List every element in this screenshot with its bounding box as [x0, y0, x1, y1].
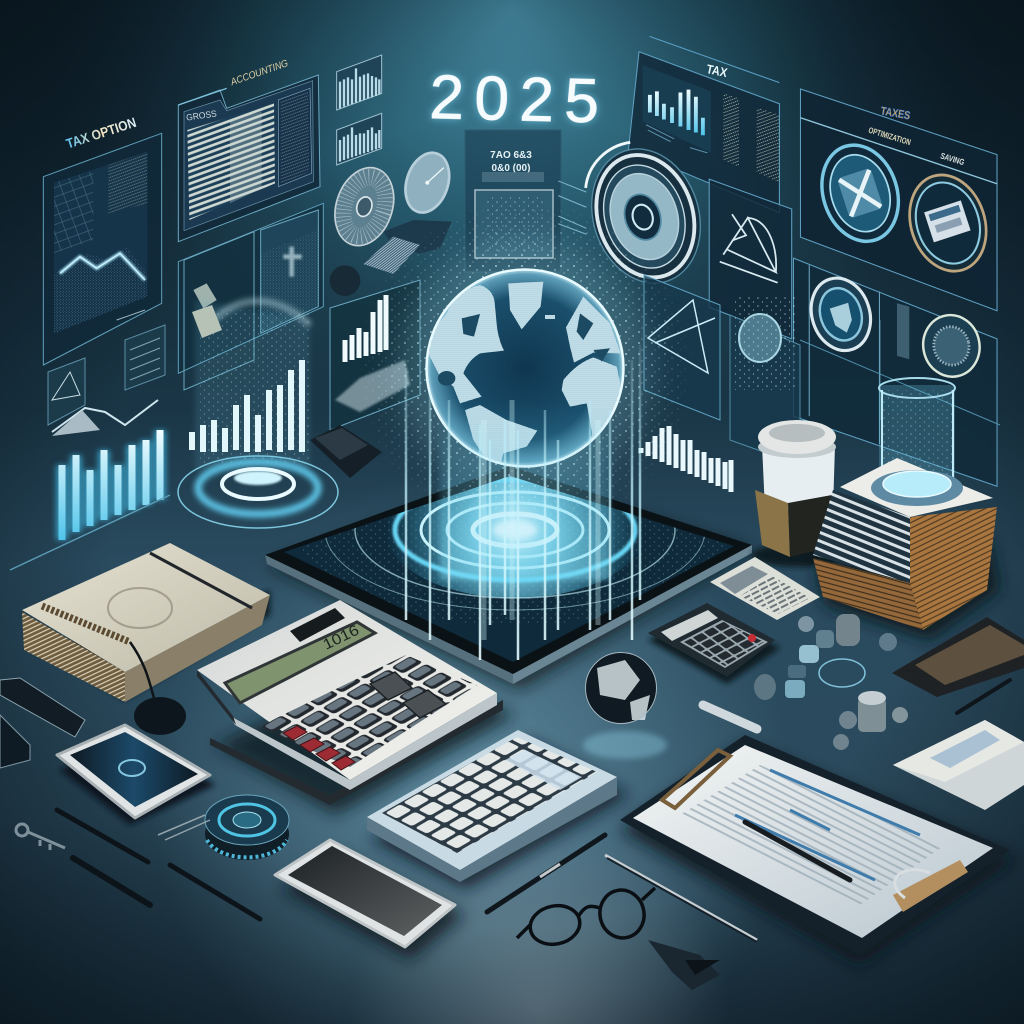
paper stack: [813, 458, 1000, 640]
notebook: [22, 543, 270, 710]
chart: trend arrow: [52, 400, 158, 432]
silver cylinder: [703, 705, 757, 729]
long pen: [605, 855, 757, 942]
chart: hologram bars: [192, 360, 302, 452]
glowing ring on papers: [871, 470, 963, 506]
panel: shield and card rings: [800, 89, 998, 311]
mini chart two: [337, 113, 382, 165]
pen three: [170, 865, 260, 919]
tablet: [265, 445, 755, 690]
phone with emblem: [57, 725, 215, 825]
fountain pen: [487, 835, 605, 912]
globe: [355, 198, 695, 538]
panel code lines: 7AO 6&3: [490, 150, 532, 161]
calculator: [197, 600, 515, 815]
label: spreadsheet title: GROSS: [186, 108, 217, 123]
keys: [16, 824, 65, 850]
panels: right wire and bars: [641, 275, 1000, 492]
panel: tax bar chart: [628, 36, 779, 213]
right hologram panels: [558, 36, 998, 486]
left hologram panels: [43, 55, 456, 390]
large flat keys: [370, 672, 446, 718]
paper crane: [648, 940, 720, 990]
hologram cylinder right: [879, 378, 955, 485]
crystal globe: [583, 652, 667, 759]
panel: tax option chart: [43, 133, 162, 365]
heading: tax option: TAX OPTION: [64, 115, 138, 152]
keyboard: [367, 730, 630, 890]
envelope: [893, 720, 1024, 810]
coins and trinkets: [754, 614, 908, 750]
red keys: [283, 726, 355, 770]
label: tax: TAX: [705, 62, 729, 80]
panel code lines: 0&0 (00): [492, 163, 530, 174]
icon: large dial: [325, 160, 403, 253]
chart panel near globe: [330, 280, 420, 430]
chart: right white bars: [641, 426, 731, 492]
center text panel: [465, 130, 561, 272]
calculator keys: [258, 655, 477, 767]
cash bills: [892, 617, 1024, 697]
calculator digits: 1016: [320, 622, 362, 654]
pen on clipboard: [745, 822, 850, 880]
rings on tablet screen: [303, 476, 727, 622]
glowing puck: [205, 795, 289, 860]
icon: small dial: [398, 147, 456, 218]
stand base: [134, 697, 186, 735]
icon: shield x ring: [810, 135, 910, 251]
smartphone: [275, 840, 465, 960]
panel: holographic ledger: [178, 203, 323, 390]
label: panel title: TAXES: [880, 105, 912, 122]
label: saving: SAVING: [939, 150, 966, 167]
receipt calculator paper: [710, 557, 820, 620]
icon: card ring: [898, 165, 998, 281]
gold clip: [893, 860, 968, 912]
icon: large target ring: [575, 135, 717, 297]
icon: stacked folders: [363, 220, 452, 274]
portal rings: [178, 456, 338, 528]
small calculator: [648, 603, 780, 684]
panel: triangle diagram: [709, 179, 792, 339]
pen one: [57, 810, 148, 862]
chart: glowing bars: [62, 430, 160, 540]
icon: gauge ring: [918, 310, 985, 382]
label: optimization: OPTIMIZATION: [867, 125, 912, 147]
clipboard: [620, 735, 1015, 965]
icon: shield ring small: [802, 270, 880, 358]
continents: [428, 282, 622, 480]
mini chart one: [337, 55, 382, 110]
heading: accounting: ACCOUNTING: [229, 58, 290, 88]
hologram cylinder left: [178, 300, 338, 528]
decorative label lines: [558, 181, 586, 234]
panel code lines: [490, 150, 532, 174]
panel: lower right: [793, 258, 997, 486]
left glass objects: [0, 678, 85, 768]
calculator display: [225, 622, 375, 703]
paper fragment: [192, 305, 222, 338]
pen two: [73, 858, 150, 905]
icon: dark sphere: [330, 265, 360, 296]
light beams: [406, 345, 640, 660]
left decorative panel and charts: [10, 325, 170, 570]
panel: spreadsheet: [178, 75, 320, 242]
small pen right: [957, 680, 1010, 713]
glasses: [517, 886, 655, 949]
dark device under hologram: [310, 425, 382, 478]
particle haze: [355, 198, 695, 538]
paperclips: [158, 815, 210, 840]
title: 2025: 2025: [429, 63, 610, 137]
coffee cup: [752, 420, 848, 567]
